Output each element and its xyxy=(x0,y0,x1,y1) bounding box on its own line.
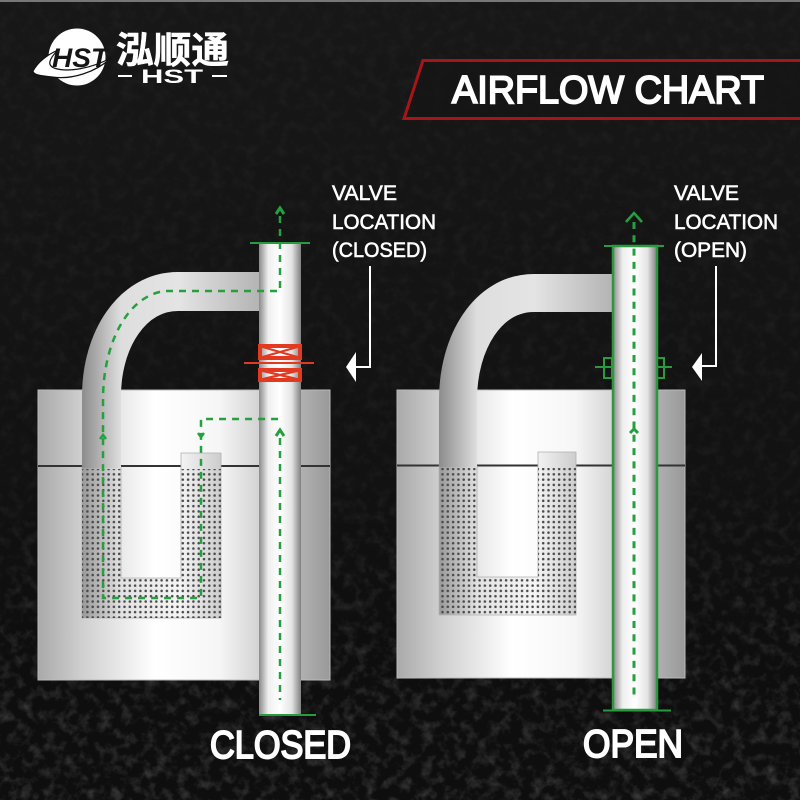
closed valve xyxy=(244,346,314,380)
hose xyxy=(458,293,614,467)
tank xyxy=(397,390,685,678)
filter element xyxy=(439,452,576,615)
hose xyxy=(102,292,262,468)
open valve xyxy=(595,358,672,378)
arrow to valve xyxy=(692,266,716,381)
title: AIRFLOW CHART xyxy=(452,69,764,112)
valve label: LOCATION xyxy=(332,211,436,234)
airflow path xyxy=(100,208,284,700)
valve label: (CLOSED) xyxy=(332,239,427,262)
label: closed: CLOSED xyxy=(210,724,351,767)
valve label: LOCATION xyxy=(674,211,778,234)
valve label: VALVE xyxy=(674,182,739,205)
panel: closed valve diagram xyxy=(38,182,436,767)
tank xyxy=(38,390,330,680)
valve label: VALVE xyxy=(332,182,397,205)
logo latin name: HST xyxy=(141,67,204,88)
label: open: OPEN xyxy=(583,723,683,766)
filter element xyxy=(82,453,221,618)
arrow to valve xyxy=(346,266,370,382)
valve label xyxy=(674,182,778,262)
valve label: (OPEN) xyxy=(674,239,747,262)
airflow path xyxy=(626,213,642,700)
title banner xyxy=(404,60,800,118)
main pipe xyxy=(613,246,657,710)
panel: open valve diagram xyxy=(397,182,778,766)
logo globe icon: HST xyxy=(52,43,111,73)
logo chinese name: 泓顺通 xyxy=(116,30,229,71)
main pipe xyxy=(259,243,301,715)
logo: HST xyxy=(33,28,229,88)
valve label xyxy=(332,182,436,262)
logo globe icon xyxy=(33,28,111,86)
